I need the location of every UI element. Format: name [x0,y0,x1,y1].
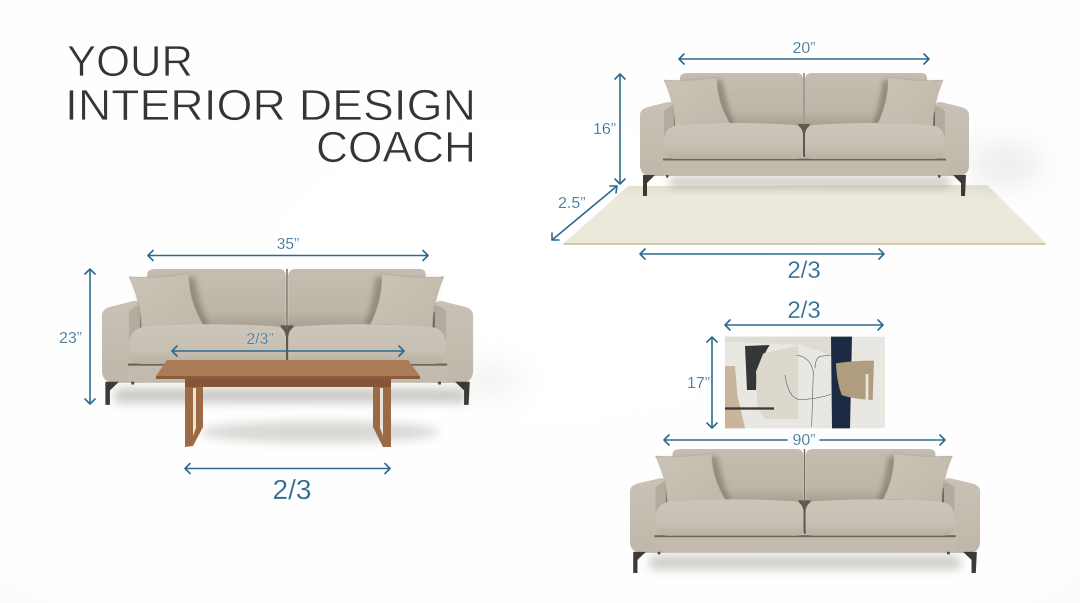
dimension: depth 2.5 inches [552,186,617,240]
panel: sofa and coffee table scene [59,236,520,505]
dimension: table two thirds: 2/3 [273,474,311,505]
sofa [640,73,969,196]
dimension: width 20 inches [679,40,929,64]
panel: sofa and rug scene [552,40,1046,284]
dimension: width 90 inches [664,432,945,449]
dimension: rug two thirds [640,249,884,284]
sofa [630,449,980,573]
title: COACH [316,123,476,172]
sofa shadow [115,364,520,403]
dimension: height 23 inches: 23” [59,330,82,347]
dimension: width 35 inches [148,236,428,260]
wall art [725,337,885,428]
dimension: height 16 inches: 16” [593,121,616,138]
sofa [102,269,473,405]
table shadow [200,421,440,443]
dimension: width 35 inches: 35” [277,236,299,253]
dimension: art height 17 inches: 17” [687,375,710,392]
title: INTERIOR DESIGN [65,81,476,130]
rug [563,185,1046,245]
coffee table [156,360,420,447]
title: YOUR [67,37,193,86]
dimension: table on sofa two thirds [172,331,404,356]
dimension: table two thirds [185,464,390,505]
sofa shadow [650,556,960,569]
dimension: rug two thirds: 2/3 [787,257,821,284]
panel: sofa and wall art scene [630,297,980,573]
title [65,37,476,172]
dimension: table on sofa two thirds: 2/3” [246,331,274,348]
dimension: depth 2.5 inches: 2.5” [558,195,586,212]
dimension: height 23 inches [59,269,95,404]
dimension: width 20 inches: 20” [792,40,816,57]
dimension: art two thirds [725,297,883,330]
floor shadow [670,143,1043,187]
dimension: art height 17 inches [687,337,717,428]
dimension: art two thirds: 2/3 [787,297,821,324]
dimension: height 16 inches [593,74,625,184]
dimension: width 90 inches: 90” [792,432,816,449]
